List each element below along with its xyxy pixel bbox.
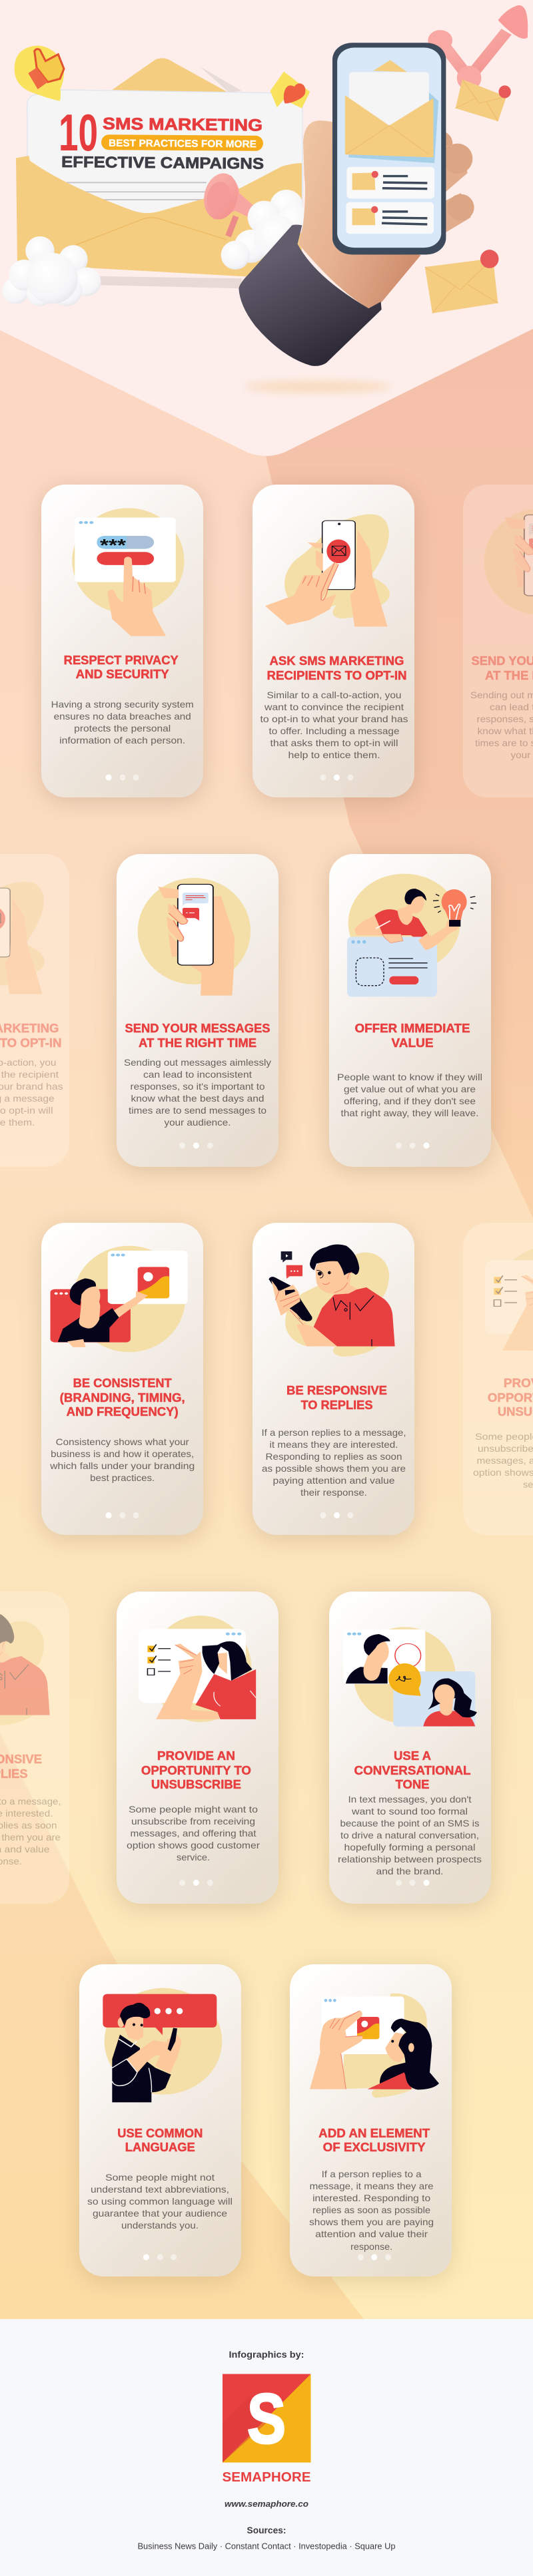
illustration: two people chatting: [343, 1627, 477, 1727]
panel: send your messages at the right time: [117, 854, 278, 1171]
body text: best practices.: [90, 1472, 155, 1483]
panel: faded next card, provide an opportunity: [463, 1223, 533, 1535]
icon: envelope top right: [456, 79, 511, 121]
heading: ASK SMS MARKETING: [269, 654, 404, 668]
pagination dots: [143, 2254, 177, 2260]
illustration: phone in hand, faded: [484, 509, 533, 626]
heading: UNSUBSCRIBE: [151, 1778, 241, 1791]
card background: [463, 485, 533, 797]
envelope with letter: [16, 58, 302, 288]
panel: use common language: [79, 1964, 241, 2280]
body text: understand text abbreviations,: [91, 2184, 229, 2195]
body text: want to convince the recipient: [264, 702, 404, 712]
card background: [290, 1964, 452, 2276]
heading: [0, 1022, 61, 1050]
heading: VALUE: [392, 1036, 433, 1050]
heading: [354, 1022, 470, 1050]
body text: that right away, they will leave.: [341, 1108, 478, 1118]
illustration: woman pointing at checklist: [139, 1615, 256, 1722]
heading: USE A: [394, 1749, 431, 1763]
body text: Sending out messages aimlessly: [124, 1057, 271, 1068]
body text: [0, 1057, 63, 1128]
top pale panel: [0, 0, 533, 456]
body text: service.: [177, 1852, 210, 1862]
pagination dots: [320, 1512, 353, 1518]
panel: ask sms marketing recipients to opt-in: [253, 485, 414, 801]
card background: [253, 1223, 414, 1535]
heading: [266, 654, 406, 682]
panel: provide an opportunity to unsubscribe: [117, 1592, 278, 1908]
heading: [141, 1749, 251, 1791]
heading: CONVERSATIONAL: [354, 1764, 471, 1777]
pagination dots: [396, 1880, 429, 1886]
illustration: password login: [72, 508, 185, 636]
pagination dots: [179, 1880, 213, 1886]
pagination dots: [396, 1142, 429, 1149]
body text: hopefully forming a personal: [344, 1842, 476, 1852]
card shadow: [329, 1596, 491, 1908]
panel: use a conversational tone: [329, 1592, 491, 1908]
heading: RECIPIENTS TO OPT-IN: [266, 669, 406, 682]
heading: [64, 654, 179, 681]
body text: Similar to a call-to-action, you: [266, 690, 401, 700]
icon: thumbs up pin: [15, 45, 64, 101]
icon: left cloud: [2, 236, 101, 306]
card background: [41, 485, 203, 797]
card shadow: [79, 1968, 241, 2280]
illustration: man with phone, faded: [0, 1613, 50, 1725]
pagination dots: [320, 774, 353, 781]
heading: [125, 1022, 270, 1050]
body text: paying attention and value: [273, 1475, 395, 1486]
card background: [0, 854, 69, 1167]
body text: it means they are interested.: [269, 1439, 398, 1450]
title pill: BEST PRACTICES FOR MORE: [109, 138, 257, 150]
heading: [472, 654, 533, 682]
body text: to opt-in to what your brand has: [260, 714, 408, 724]
body text: interested. Responding to: [312, 2193, 430, 2203]
heading: [286, 1384, 387, 1412]
icon: growth arrow: [428, 5, 528, 90]
body text: shows them you are paying: [309, 2217, 434, 2227]
body text: [309, 2169, 434, 2252]
logo mark: [223, 2374, 310, 2463]
body text: [51, 699, 194, 746]
body text: messages, and offering that: [131, 1828, 257, 1838]
heading: BE RESPONSIVE: [286, 1384, 387, 1397]
panel: be consistent: [41, 1223, 203, 1539]
body text: [337, 1072, 482, 1118]
body text: that asks them to opt-in will: [270, 738, 398, 748]
icon: right cloud: [221, 190, 308, 270]
body text: [473, 1431, 533, 1490]
body text: [127, 1804, 260, 1862]
body text: information of each person.: [59, 735, 185, 746]
title: [59, 103, 264, 172]
body text: response.: [350, 2241, 392, 2252]
body text: so using common language will: [87, 2196, 233, 2207]
heading: OPPORTUNITY TO: [141, 1764, 251, 1777]
brand name: SEMAPHORE: [223, 2470, 310, 2485]
heading: [488, 1377, 533, 1418]
smartphone: [332, 43, 446, 255]
card shadow: [41, 489, 203, 801]
body text: [470, 690, 533, 760]
card shadow: [41, 1227, 203, 1539]
body text: business is and how it operates,: [51, 1448, 194, 1459]
heading: [318, 2127, 430, 2154]
card shadow: [117, 1596, 278, 1908]
body text: If a person replies to a message,: [261, 1427, 406, 1438]
heading: [60, 1377, 185, 1418]
body text: to offer. Including a message: [269, 726, 400, 736]
illustration: hand pinching image, woman: [310, 1994, 439, 2098]
body text: [261, 1427, 406, 1498]
body text: People want to know if they will: [337, 1072, 482, 1082]
heading: TONE: [396, 1778, 429, 1791]
icon: megaphone: [200, 170, 255, 238]
body text: because the point of an SMS is: [340, 1818, 480, 1828]
body text: unsubscribe from receiving: [131, 1816, 255, 1826]
body text: option shows good customer: [127, 1840, 260, 1850]
background wedge right: [265, 329, 533, 1218]
body text: [260, 690, 408, 760]
body text: Responding to replies as soon: [265, 1451, 402, 1462]
hero illustration: [2, 5, 528, 393]
body text: Some people might want to: [129, 1804, 258, 1815]
card background: [463, 1223, 533, 1535]
card background: [117, 1592, 278, 1904]
pagination dots: [358, 2254, 391, 2260]
panel: faded next card, send your messages: [463, 485, 533, 797]
sources heading: Sources:: [247, 2525, 286, 2535]
body text: replies as soon as possible: [312, 2205, 430, 2215]
panel: add an element of exclusivity: [290, 1964, 452, 2280]
body text: [0, 1796, 61, 1866]
heading: [354, 1749, 471, 1791]
panel: faded previous card, be responsive: [0, 1592, 69, 1904]
heading: USE COMMON: [117, 2127, 203, 2140]
background wedge left: [0, 1733, 364, 2319]
title number: 10: [59, 103, 98, 162]
heading: SEND YOUR MESSAGES: [125, 1022, 270, 1035]
body text: ensures no data breaches and: [54, 711, 191, 722]
title line one: SMS MARKETING: [103, 114, 263, 135]
body text: want to sound too formal: [351, 1806, 468, 1817]
body text: offering, and if they don't see: [344, 1096, 476, 1106]
body text: can lead to inconsistent: [143, 1069, 252, 1080]
card background: [41, 1223, 203, 1535]
card shadow: [290, 1968, 452, 2280]
card background: [253, 485, 414, 797]
card background: [117, 854, 278, 1167]
card shadow: [329, 858, 491, 1171]
body text: help to entice them.: [288, 750, 380, 760]
heading: [0, 1753, 42, 1781]
body text: understands you.: [121, 2220, 199, 2231]
pagination dots: [105, 774, 139, 781]
body text: relationship between prospects: [338, 1854, 482, 1864]
body text: which falls under your branding: [49, 1460, 195, 1471]
heading: RESPECT PRIVACY: [64, 654, 179, 667]
body text: message, it means they are: [310, 2181, 434, 2191]
panel: respect privacy and security: [41, 485, 203, 801]
credit label: Infographics by:: [229, 2349, 304, 2360]
card shadow: [117, 858, 278, 1171]
body text: get value out of what you are: [344, 1084, 476, 1094]
title line three: EFFECTIVE CAMPAIGNS: [61, 153, 264, 172]
card background: [79, 1964, 241, 2276]
footer background: [0, 2319, 533, 2576]
body text: their response.: [300, 1487, 367, 1498]
body text: protects the personal: [74, 723, 171, 734]
footer: [0, 2319, 533, 2576]
body text: [124, 1057, 271, 1128]
body text: your audience.: [164, 1117, 231, 1128]
illustration: checklist, faded: [485, 1247, 533, 1353]
heading: LANGUAGE: [125, 2141, 195, 2154]
body text: attention and value their: [315, 2229, 428, 2239]
heading: OFFER IMMEDIATE: [354, 1022, 470, 1035]
panel: faded previous card, ask sms marketing: [0, 854, 69, 1167]
illustration: man with phone: [268, 1245, 395, 1357]
illustration: man texting with red speech bubble: [103, 1988, 222, 2102]
body text: [338, 1794, 482, 1876]
body text: to drive a natural conversation,: [340, 1830, 479, 1840]
heading: [117, 2127, 203, 2154]
pagination dots: [105, 1512, 139, 1518]
body text: Some people might not: [105, 2172, 215, 2183]
heading: TO REPLIES: [301, 1398, 373, 1412]
heading: (BRANDING, TIMING,: [60, 1391, 185, 1404]
body text: guarantee that your audience: [93, 2208, 227, 2219]
panel: offer immediate value: [329, 854, 491, 1171]
title pill: [101, 134, 263, 151]
body text: as possible shows them you are: [262, 1463, 406, 1474]
logo mark: S: [247, 2380, 286, 2458]
illustration: man with light bulb: [347, 874, 476, 996]
body text: Having a strong security system: [51, 699, 194, 710]
heading: AND FREQUENCY): [67, 1405, 179, 1418]
body text: responses, so it's important to: [131, 1081, 265, 1092]
illustration: password login: ***: [100, 535, 127, 555]
body text: know what the best days and: [131, 1093, 264, 1104]
hand shadow: [245, 381, 391, 393]
sources list: Business News Daily · Constant Contact · Investopedia · Square Up: [137, 2541, 396, 2551]
card background: [329, 854, 491, 1167]
body text: [49, 1436, 195, 1483]
illustration: hands tapping phone, faded: [0, 881, 45, 994]
heading: BE CONSISTENT: [73, 1377, 172, 1390]
illustration: hands tapping phone: [265, 514, 390, 626]
body text: [87, 2172, 233, 2231]
heading: PROVIDE AN: [157, 1749, 235, 1763]
website: www.semaphore.co: [225, 2499, 308, 2509]
body text: If a person replies to a: [322, 2169, 422, 2179]
body text: In text messages, you don't: [348, 1794, 472, 1805]
card background: [0, 1592, 69, 1904]
card shadow: [253, 1227, 414, 1539]
body text: and the brand.: [376, 1866, 444, 1876]
body text: times are to send messages to: [129, 1105, 266, 1116]
icon: envelope bottom right: [425, 250, 498, 314]
panel: be responsive to replies: [253, 1223, 414, 1539]
illustration: woman with image windows: [51, 1246, 188, 1352]
card shadow: [253, 489, 414, 801]
heading: OF EXCLUSIVITY: [323, 2141, 426, 2154]
heading: AND SECURITY: [76, 668, 169, 681]
pagination dots: [179, 1142, 213, 1149]
card background: [329, 1592, 491, 1904]
illustration: phone in hand: [138, 878, 251, 996]
heading: ADD AN ELEMENT: [318, 2127, 430, 2140]
heading: AT THE RIGHT TIME: [139, 1036, 257, 1050]
body text: Consistency shows what your: [56, 1436, 189, 1447]
hand holding phone: [239, 120, 474, 366]
icon: heart bubble: [270, 72, 310, 108]
